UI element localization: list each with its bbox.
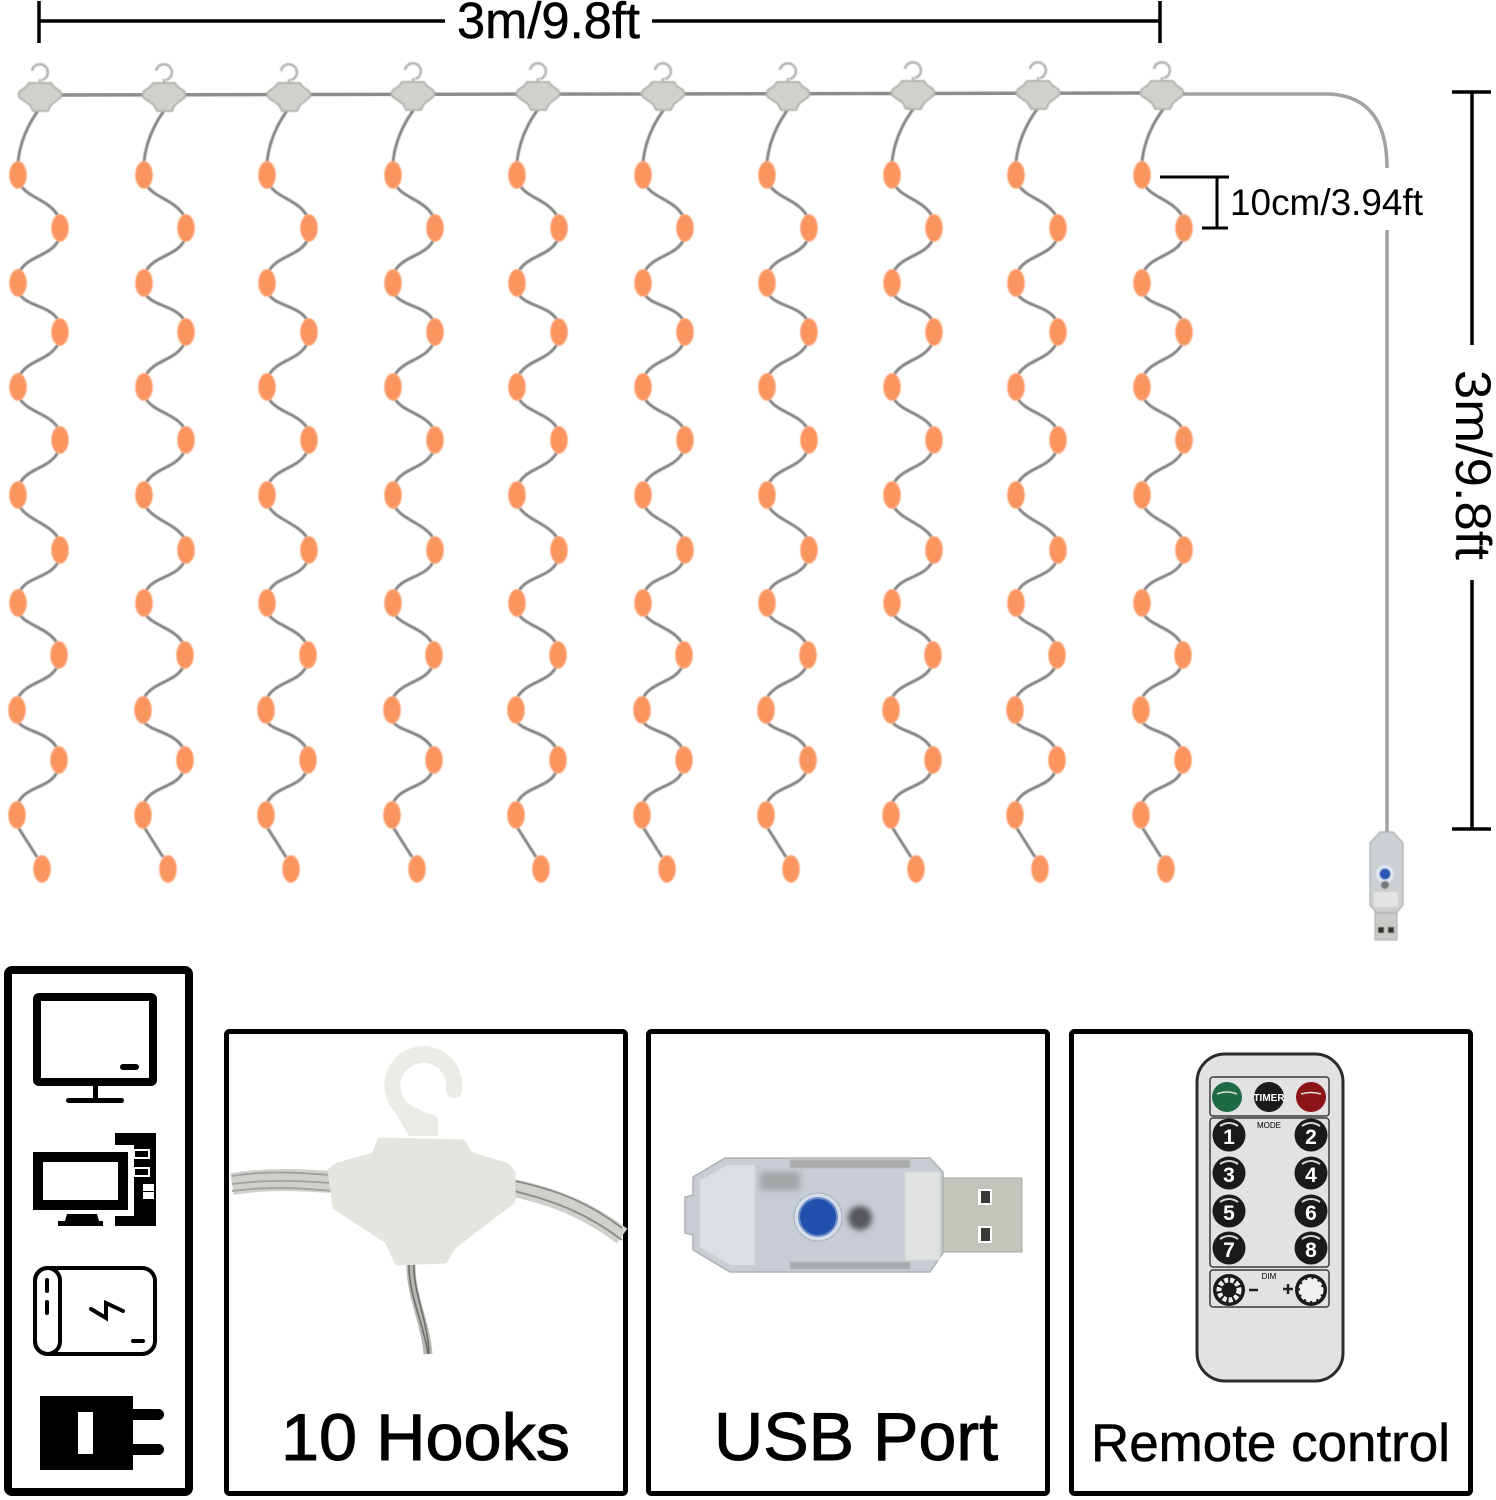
panel: remote control	[1072, 1032, 1470, 1494]
light strand 4	[384, 63, 444, 883]
light strand 5	[508, 63, 568, 883]
image: hook connector	[232, 1046, 622, 1354]
panel: USB port	[648, 1032, 1048, 1494]
spacing dimension	[1160, 177, 1424, 228]
panel: 10 hooks	[226, 1032, 626, 1494]
image: remote	[1197, 1054, 1343, 1381]
image: remote: 1	[1223, 1126, 1235, 1149]
light strand 2	[134, 64, 194, 883]
light strand 8	[882, 62, 942, 883]
image: remote: DIM	[1262, 1272, 1277, 1281]
image: remote: 8	[1305, 1239, 1317, 1262]
image: USB controller	[685, 1158, 1022, 1272]
light strand 3	[258, 64, 318, 883]
light strand 9	[1006, 62, 1066, 883]
light strand 10	[1132, 62, 1192, 883]
image: remote: 6	[1305, 1202, 1317, 1225]
image: remote: 4	[1305, 1164, 1317, 1187]
icon: monitor	[37, 997, 153, 1103]
light strand 6	[634, 63, 694, 883]
main cable	[40, 93, 1162, 95]
light strand 7	[758, 63, 818, 883]
height dimension line	[1445, 92, 1496, 829]
image: remote: TIMER	[1253, 1093, 1285, 1104]
lead cable to USB	[1183, 94, 1387, 834]
panel: power sources	[8, 970, 189, 1492]
image: remote: 2	[1305, 1126, 1317, 1149]
icon: power bank	[35, 1268, 155, 1354]
light strand 1	[8, 64, 68, 883]
spacing dimension: 10cm/3.94ft	[1230, 182, 1424, 223]
image: remote: 7	[1223, 1239, 1235, 1262]
label: Remote control: Remote control	[1091, 1414, 1450, 1473]
image: remote: 3	[1223, 1164, 1235, 1187]
label: USB Port: USB Port	[714, 1399, 998, 1475]
icon: wall plug	[40, 1396, 164, 1470]
small USB controller	[1370, 832, 1403, 940]
icon: desktop computer	[38, 1133, 156, 1226]
image: remote: 5	[1223, 1202, 1235, 1225]
image: remote: MODE	[1257, 1121, 1281, 1130]
width dimension line	[39, 0, 1160, 49]
label: 10 Hooks: 10 Hooks	[281, 1400, 570, 1474]
